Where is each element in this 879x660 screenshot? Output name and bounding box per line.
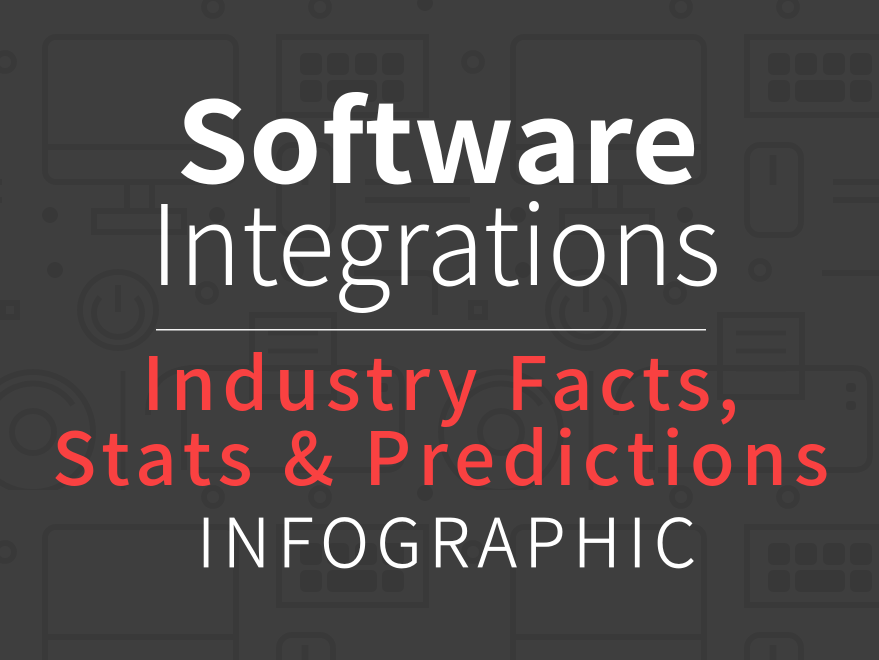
label: INFOGRAPHIC: INFOGRAPHIC	[197, 490, 696, 587]
heading: Stats & Predictions: Stats & Predictions	[52, 401, 829, 507]
divider line	[156, 329, 706, 330]
title: Software: Software	[176, 54, 699, 216]
subtitle: Integrations: Integrations	[150, 156, 721, 317]
heading: Industry Facts,: Industry Facts,	[142, 326, 739, 432]
